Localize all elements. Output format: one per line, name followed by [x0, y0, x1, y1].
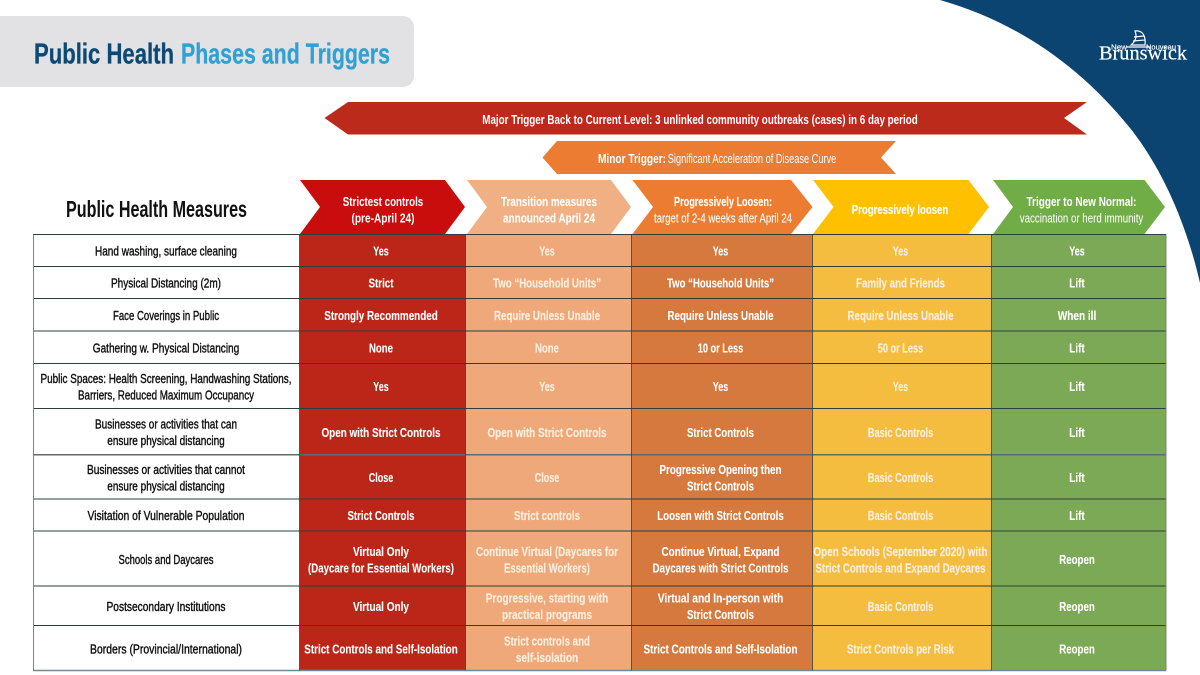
- row: businesses that can distance: Basic Controls: [868, 425, 933, 440]
- row: face coverings: Require Unless Unable: [494, 308, 600, 323]
- row: gathering: Lift: [1069, 340, 1085, 355]
- row: businesses that can distance: ensure physical distancing: [107, 433, 225, 448]
- logo: New Brunswick: Brunswick: [1099, 42, 1187, 64]
- phase chevron: progressively loosen with target: Progressively Loosen:: [674, 194, 772, 209]
- row: businesses that cannot distance: Businesses or activities that cannot: [87, 462, 245, 477]
- row: postsecondary: practical programs: [502, 607, 592, 622]
- phase chevron: transition measures: Transition measures: [501, 194, 597, 209]
- phase chevron: progressively loosen: Progressively loosen: [852, 202, 948, 217]
- row: physical distancing: Strict: [368, 276, 394, 291]
- row: visitation: Basic Controls: [868, 508, 933, 523]
- title: Public Health: [34, 38, 174, 70]
- row: businesses that can distance: Lift: [1069, 425, 1085, 440]
- row: postsecondary: Progressive, starting with: [486, 590, 608, 605]
- row: businesses that cannot distance: Strict Controls: [687, 478, 754, 493]
- phase chevron: trigger to new normal: Trigger to New Normal:: [1026, 194, 1136, 209]
- row: borders: Strict Controls per Risk: [847, 641, 955, 656]
- phase chevron: progressively loosen with target: [632, 180, 812, 234]
- row: physical distancing: Two “Household Units”: [667, 276, 774, 291]
- title: Phases and Triggers: [181, 38, 390, 70]
- phase chevron: transition measures: [467, 180, 631, 234]
- arrow: major trigger: [324, 102, 1087, 134]
- row: borders: [90, 633, 1095, 665]
- row: schools and daycares: Continue Virtual (Daycares for: [476, 544, 618, 559]
- row: physical distancing: [111, 276, 1085, 291]
- row: schools and daycares: (Daycare for Essential Workers): [308, 560, 454, 575]
- row: postsecondary: Basic Controls: [868, 599, 933, 614]
- row: schools and daycares: Daycares with Strict Controls: [652, 560, 788, 575]
- row: public spaces: [40, 371, 1085, 402]
- row: schools and daycares: Virtual Only: [353, 544, 410, 559]
- row: businesses that cannot distance: Lift: [1069, 470, 1085, 485]
- row: visitation: Strict Controls: [348, 508, 414, 523]
- measures table: [33, 234, 1166, 670]
- row: postsecondary: Virtual and In-person with: [658, 590, 783, 605]
- row: gathering: Gathering w. Physical Distancing: [93, 340, 239, 355]
- row: businesses that can distance: Open with Strict Controls: [322, 425, 440, 440]
- row: physical distancing: Family and Friends: [856, 276, 945, 291]
- row: hand washing: Yes: [1069, 243, 1085, 258]
- row: businesses that cannot distance: ensure physical distancing: [107, 478, 225, 493]
- row: visitation: Visitation of Vulnerable Population: [88, 508, 244, 523]
- phase chevron: strictest controls: [300, 180, 465, 234]
- row: postsecondary: Postsecondary Institutions: [106, 599, 226, 614]
- row: schools and daycares: Schools and Daycares: [118, 552, 214, 567]
- row: postsecondary: Virtual Only: [353, 599, 410, 614]
- row: businesses that can distance: Open with Strict Controls: [488, 425, 606, 440]
- row: visitation: Strict controls: [514, 508, 580, 523]
- arrow: major trigger: Major Trigger Back to Current Level: 3 unlinked community outbreaks (cases) in 6 day period: [482, 112, 918, 127]
- row: postsecondary: Reopen: [1059, 599, 1095, 614]
- row: businesses that can distance: Strict Controls: [687, 425, 754, 440]
- row: face coverings: Face Coverings in Public: [113, 308, 219, 323]
- row: schools and daycares: Strict Controls and Expand Daycares: [816, 560, 986, 575]
- row: schools and daycares: Open Schools (September 2020) with: [814, 544, 988, 559]
- row: schools and daycares: [118, 544, 1095, 575]
- row: businesses that cannot distance: Close: [535, 470, 559, 485]
- phase chevron: progressively loosen: [813, 180, 989, 234]
- row: physical distancing: Physical Distancing (2m): [111, 276, 221, 291]
- row: visitation: [88, 508, 1085, 523]
- phase chevron: progressively loosen with target: target of 2-4 weeks after April 24: [654, 210, 792, 226]
- title panel: [0, 16, 414, 87]
- phase chevron: strictest controls: Strictest controls: [343, 194, 423, 209]
- row: visitation: Loosen with Strict Controls: [657, 508, 784, 523]
- row: businesses that can distance: Businesses or activities that can: [95, 416, 237, 431]
- logo: New Brunswick: Nouveau: [1146, 44, 1176, 52]
- row: public spaces: Yes: [373, 379, 389, 394]
- heading: public health measures: Public Health Measures: [66, 196, 247, 222]
- row: schools and daycares: Essential Workers): [504, 560, 590, 575]
- row: public spaces: Lift: [1069, 379, 1085, 394]
- row: hand washing: Yes: [713, 243, 728, 258]
- navy corner curve: [940, 0, 1200, 283]
- row: borders: Borders (Provincial/International): [90, 641, 242, 656]
- row: physical distancing: Two “Household Units”: [493, 276, 601, 291]
- title: [34, 38, 390, 70]
- row: gathering: 10 or Less: [698, 340, 743, 355]
- arrow: minor trigger: Minor Trigger:: [598, 151, 666, 166]
- arrow: minor trigger: [542, 141, 896, 174]
- arrow: minor trigger: Significant Acceleration of Disease Curve: [668, 151, 836, 166]
- row: businesses that cannot distance: [87, 462, 1085, 493]
- row: gathering: None: [535, 340, 559, 355]
- row: face coverings: When ill: [1058, 308, 1096, 323]
- row: businesses that can distance: [95, 416, 1085, 448]
- row: borders: self-isolation: [516, 650, 578, 665]
- row: visitation: Lift: [1069, 508, 1085, 523]
- row: face coverings: Require Unless Unable: [668, 308, 774, 323]
- logo: New Brunswick: New: [1111, 44, 1128, 52]
- row: public spaces: Public Spaces: Health Screening, Handwashing Stations,: [40, 371, 292, 386]
- icon: ship: [1126, 31, 1150, 47]
- row: businesses that cannot distance: Progressive Opening then: [660, 462, 782, 477]
- row: hand washing: [95, 243, 1085, 258]
- row: borders: Strict controls and: [504, 633, 590, 648]
- row: postsecondary: Strict Controls: [687, 607, 754, 622]
- row: borders: Strict Controls and Self-Isolation: [644, 641, 798, 656]
- row: businesses that cannot distance: Close: [369, 470, 393, 485]
- row: face coverings: [113, 308, 1096, 323]
- column backgrounds: [34, 234, 1166, 670]
- row: hand washing: Hand washing, surface cleaning: [95, 243, 237, 258]
- row: borders: Reopen: [1059, 641, 1095, 656]
- row: physical distancing: Lift: [1069, 276, 1085, 291]
- row: face coverings: Require Unless Unable: [848, 308, 954, 323]
- row: gathering: 50 or Less: [878, 340, 923, 355]
- phase chevron: trigger to new normal: vaccination or herd immunity: [1020, 210, 1144, 226]
- phase chevron: trigger to new normal: [993, 180, 1165, 234]
- row: borders: Strict Controls and Self-Isolation: [304, 641, 458, 656]
- phase chevron: transition measures: announced April 24: [503, 210, 596, 226]
- row: businesses that cannot distance: Basic Controls: [868, 470, 933, 485]
- row: gathering: [93, 340, 1085, 355]
- row: gathering: None: [369, 340, 393, 355]
- row: public spaces: Barriers, Reduced Maximum Occupancy: [78, 387, 254, 402]
- row: postsecondary: [106, 590, 1095, 622]
- row: hand washing: Yes: [893, 243, 908, 258]
- phase chevron: strictest controls: (pre-April 24): [352, 210, 414, 226]
- logo: New Brunswick: [1099, 31, 1187, 65]
- row: schools and daycares: Reopen: [1059, 552, 1095, 567]
- row: public spaces: Yes: [713, 379, 728, 394]
- row: hand washing: Yes: [373, 243, 389, 258]
- row: face coverings: Strongly Recommended: [324, 308, 438, 323]
- row: public spaces: Yes: [893, 379, 908, 394]
- row: hand washing: Yes: [539, 243, 555, 258]
- row: public spaces: Yes: [539, 379, 555, 394]
- row: schools and daycares: Continue Virtual, Expand: [662, 544, 780, 559]
